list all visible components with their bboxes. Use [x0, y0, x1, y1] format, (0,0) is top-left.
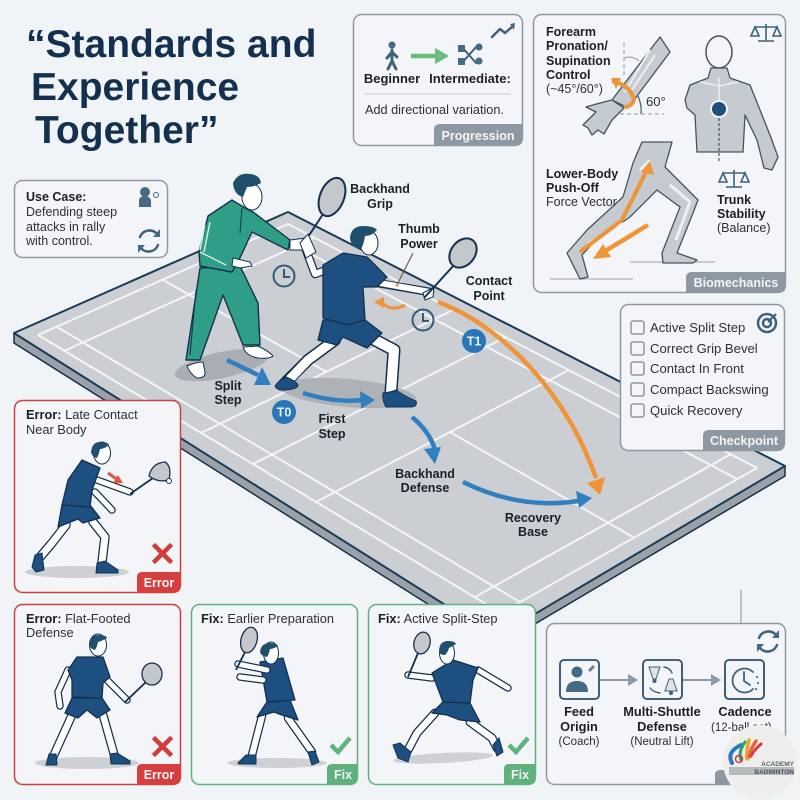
icon: coach person [139, 187, 158, 207]
trunk label [717, 193, 770, 235]
blue arrow: first step [303, 391, 375, 409]
logo badge [723, 725, 797, 799]
figure: split-step [393, 630, 508, 766]
panel: drill workflow [546, 624, 786, 785]
use case text [25, 190, 117, 248]
icon: scales top [751, 24, 781, 41]
logo text: ACADEMY [761, 761, 795, 768]
tag: error: Error [144, 768, 174, 782]
small orange rotation arrow [374, 297, 405, 308]
title: Together” [35, 109, 218, 152]
tag: progression [434, 124, 523, 146]
logo swoosh [730, 740, 761, 763]
court labels: Split [214, 379, 242, 393]
checklist text: Active Split Step [650, 320, 745, 335]
workflow labels: Cadence [718, 704, 772, 719]
panel: checkpoint [620, 304, 785, 451]
tag: checkpoint [703, 430, 785, 451]
racket: coach held [306, 174, 351, 240]
court labels: Contact [466, 274, 513, 288]
tag: progression: Progression [442, 129, 514, 143]
forearm label: Pronation/ [546, 39, 608, 53]
title [26, 23, 316, 152]
progression labels: Intermediate: [429, 71, 511, 86]
trunk label: (Balance) [717, 221, 770, 235]
checklist text [650, 320, 769, 418]
push-off label [546, 167, 618, 209]
arrows: push-off force [580, 161, 654, 259]
trunk label: Stability [717, 207, 766, 221]
icon: refresh [757, 630, 779, 652]
coach figure [172, 174, 306, 388]
checklist text: Quick Recovery [650, 403, 743, 418]
icon box: cadence [725, 660, 764, 699]
title: Experience [31, 66, 239, 109]
court labels: Recovery [505, 511, 561, 525]
connector line [740, 590, 742, 623]
tag: error: Error [144, 576, 174, 590]
court labels: Step [318, 427, 346, 441]
progression labels: Add directional variation. [365, 103, 504, 117]
tag: biomechanics [686, 272, 786, 293]
court labels: Backhand [395, 467, 455, 481]
icon box: feed origin [560, 660, 599, 699]
checklist text: Compact Backswing [650, 382, 769, 397]
panel: error flat-footed [14, 604, 181, 785]
logo badge: BADMINTON [754, 769, 794, 776]
use case text: Defending steep [26, 205, 117, 219]
push-off label: Push-Off [546, 181, 600, 195]
checklist text: Contact In Front [650, 361, 744, 376]
forearm label: (~45°/60°) [546, 82, 603, 96]
error text: Defense [26, 625, 74, 640]
player figure [275, 226, 434, 413]
error text: Error: Late Contact [26, 407, 138, 422]
badge: T1: T1 [467, 334, 481, 348]
figure: preparation [227, 625, 327, 768]
icon: red cross [155, 546, 170, 561]
workflow labels [559, 704, 772, 748]
fix text: Fix: Active Split-Step [378, 611, 498, 626]
court labels: Grip [367, 197, 393, 211]
court [14, 212, 785, 647]
court labels: Step [214, 393, 242, 407]
figure: flat-footed [35, 634, 162, 769]
tag: fix: Fix [511, 768, 529, 782]
torso illustration [685, 36, 778, 170]
workflow labels: (Neutral Lift) [630, 736, 694, 748]
trunk label: Trunk [717, 193, 751, 207]
forearm illustration [583, 37, 670, 135]
court labels: Base [518, 525, 548, 539]
forearm label: Control [546, 68, 590, 82]
court labels: Point [473, 289, 505, 303]
icon: green check [509, 738, 528, 752]
orange shuttle trajectory arrow [438, 302, 605, 495]
progression labels [364, 71, 511, 117]
error text: Near Body [26, 422, 87, 437]
court labels: First [318, 412, 346, 426]
panel: fix active split-step [368, 604, 536, 785]
forearm label [546, 25, 666, 109]
blue arrow: recovery [463, 482, 592, 508]
progression labels: Beginner [364, 71, 420, 86]
icon: green check [331, 738, 350, 752]
icon: trend up [492, 23, 515, 37]
icon: refresh [138, 229, 160, 253]
icon box: multi-shuttle [643, 660, 682, 699]
forearm label: Supination [546, 54, 611, 68]
racket: player [424, 233, 482, 298]
forearm label: 60° [646, 94, 666, 109]
forearm label: Forearm [546, 25, 596, 39]
title: “Standards and [26, 23, 316, 66]
arrow: red late contact [108, 473, 123, 483]
court labels: Thumb [398, 222, 440, 236]
court labels: Backhand [350, 182, 410, 196]
checklist text: Correct Grip Bevel [650, 341, 758, 356]
error text [26, 407, 138, 437]
error text [26, 611, 131, 640]
panel: error late contact [14, 400, 181, 593]
workflow labels: (Coach) [559, 736, 600, 748]
push-off label: Force Vector [546, 195, 617, 209]
figure: late contact [25, 442, 172, 578]
blue arrow: split step [227, 360, 271, 385]
tag: checkpoint: Checkpoint [710, 434, 779, 448]
court labels: Defense [401, 481, 449, 495]
panel: fix earlier preparation [192, 604, 358, 785]
workflow labels: Defense [637, 719, 687, 734]
badge: T0: T0 [277, 406, 291, 420]
icon: red cross [155, 739, 170, 754]
use case text: Use Case: [26, 190, 86, 204]
tag: fix: Fix [334, 768, 352, 782]
icon: walking beginner [387, 42, 397, 69]
workflow labels: Origin [560, 719, 598, 734]
use case text: attacks in rally [26, 220, 106, 234]
tag stub [715, 770, 740, 785]
badge: T0 [272, 400, 296, 424]
tag: biomechanics: Biomechanics [694, 276, 778, 290]
arrow: feed to defense [600, 674, 638, 686]
arrow: green progression [411, 48, 449, 64]
workflow labels: Multi-Shuttle [623, 704, 701, 719]
badge: T1 [462, 329, 486, 353]
tag: error [137, 764, 181, 785]
icon: branching nodes [458, 44, 482, 65]
icon: clock left [274, 266, 294, 286]
panel: progression [354, 14, 523, 146]
arrow: defense to cadence [683, 674, 721, 686]
blue arrow: backhand defense [412, 417, 441, 464]
icon: clock right [412, 310, 434, 330]
tag: error [137, 572, 181, 593]
tag: fix [504, 764, 536, 785]
court labels: Power [400, 237, 438, 251]
panel: biomechanics [534, 14, 786, 293]
leg illustration [550, 142, 715, 279]
court labels [214, 182, 561, 539]
use case text: with control. [25, 234, 93, 248]
tag: fix [327, 764, 358, 785]
error text: Error: Flat-Footed [26, 611, 131, 626]
icon: scales trunk [719, 170, 749, 187]
workflow labels: Feed [564, 704, 594, 719]
push-off label: Lower-Body [546, 167, 618, 181]
checklist [631, 321, 644, 417]
fix text: Fix: Earlier Preparation [201, 611, 334, 626]
workflow labels: (12-ball set) [711, 722, 772, 734]
panel: use case [14, 180, 168, 258]
icon: target [758, 314, 776, 332]
